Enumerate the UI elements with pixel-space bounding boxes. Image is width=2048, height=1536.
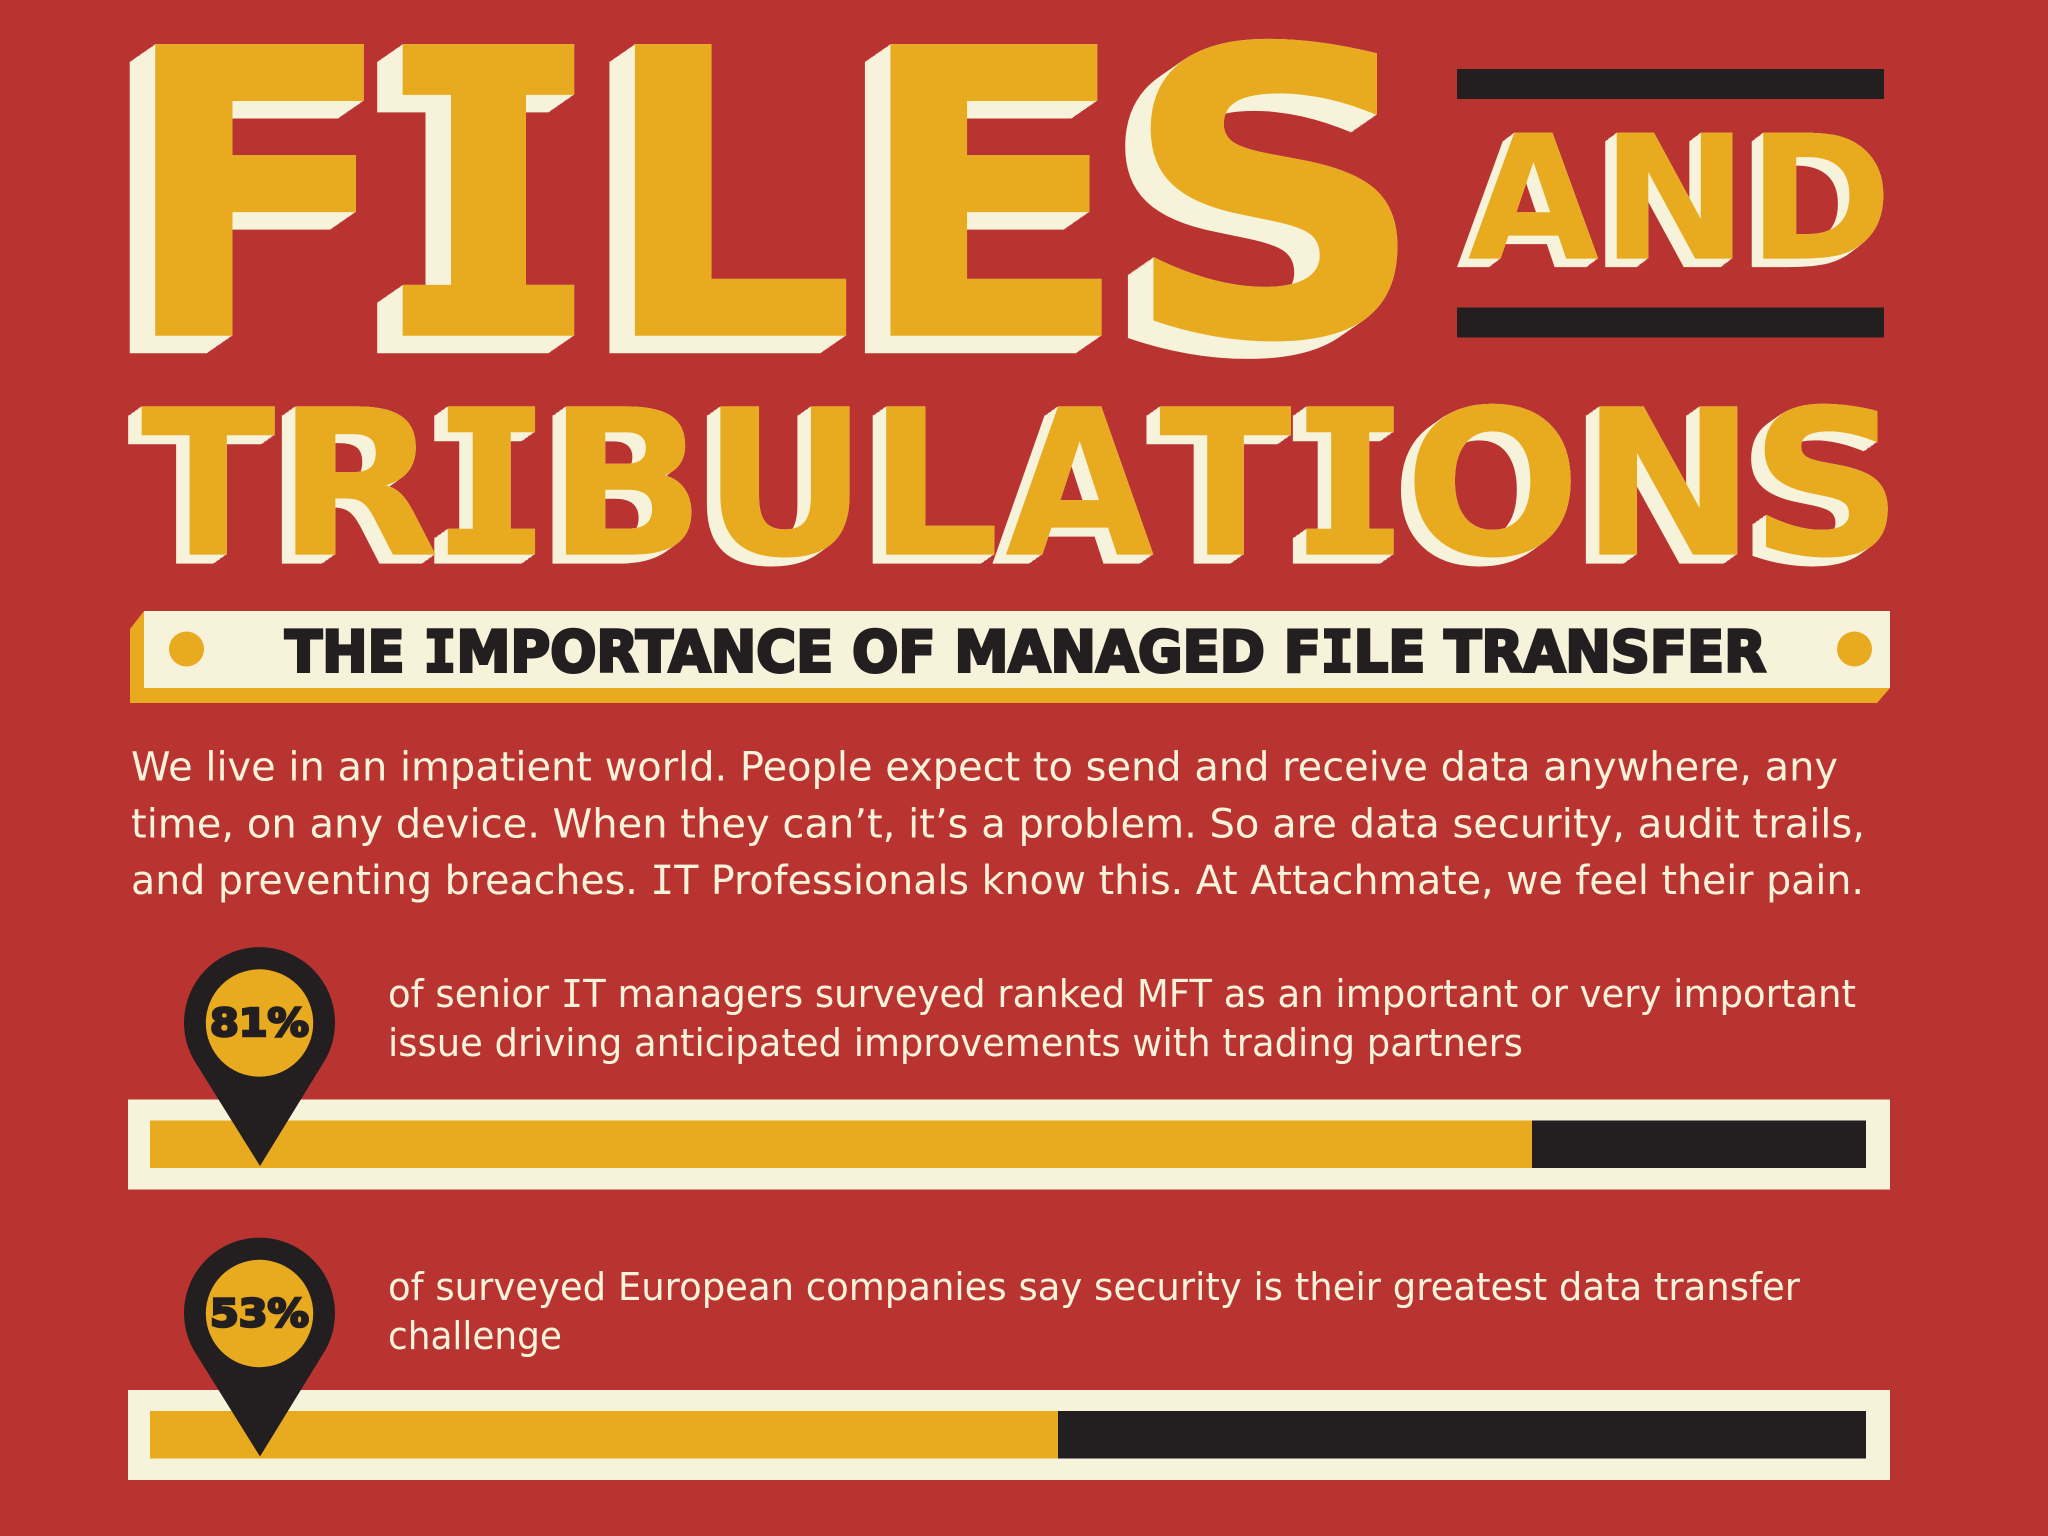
stat text: 53%: challenge xyxy=(388,1314,562,1358)
pin: 53% xyxy=(184,1238,335,1456)
pin: 81%: 81% xyxy=(210,1001,309,1045)
intro paragraph: and preventing breaches. IT Professionals know this. At Attachmate, we feel their pain. xyxy=(131,858,1864,904)
title: AND with black rules xyxy=(1457,69,1892,338)
intro paragraph xyxy=(131,744,1865,904)
subtitle banner: THE IMPORTANCE OF MANAGED FILE TRANSFER xyxy=(285,620,1766,686)
title: TRIBULATIONS: R xyxy=(276,367,440,603)
title: FILES xyxy=(118,0,1429,431)
title: TRIBULATIONS: L xyxy=(867,366,1000,603)
title: TRIBULATIONS: I xyxy=(431,366,552,603)
title: TRIBULATIONS: T xyxy=(1159,366,1292,603)
pin: 53%: 53% xyxy=(210,1292,309,1336)
stat text: 53%: of surveyed European companies say security is their greatest data transfer xyxy=(388,1265,1800,1309)
pin: 81% xyxy=(184,947,335,1166)
stat text: 53% xyxy=(388,1265,1800,1358)
intro paragraph: We live in an impatient world. People expect to send and receive data anywhere, any xyxy=(131,744,1838,790)
title: TRIBULATIONS: U xyxy=(702,367,868,603)
title: TRIBULATIONS: A xyxy=(1005,366,1154,603)
title: AND with black rules: D xyxy=(1747,99,1892,300)
title: AND with black rules: N xyxy=(1600,99,1749,300)
title: AND with black rules: A xyxy=(1468,99,1599,300)
title: TRIBULATIONS: O xyxy=(1404,366,1581,603)
title: TRIBULATIONS: T xyxy=(141,367,276,603)
intro paragraph: time, on any device. When they can’t, it’s a problem. So are data security, audit trails, xyxy=(131,801,1865,847)
stat bar: 81% xyxy=(128,1100,1890,1190)
stat text: 81%: of senior IT managers surveyed ranked MFT as an important or very important xyxy=(388,972,1856,1016)
title: TRIBULATIONS: I xyxy=(1290,366,1411,603)
stat text: 81% xyxy=(388,972,1856,1065)
title: TRIBULATIONS: N xyxy=(1580,366,1757,603)
stat text: 81%: issue driving anticipated improvements with trading partners xyxy=(388,1021,1523,1065)
stat bar: 53% xyxy=(128,1390,1890,1480)
title: TRIBULATIONS: S xyxy=(1749,367,1903,603)
title: TRIBULATIONS xyxy=(141,366,1903,603)
title: TRIBULATIONS: B xyxy=(547,366,706,603)
subtitle banner xyxy=(130,611,1890,703)
